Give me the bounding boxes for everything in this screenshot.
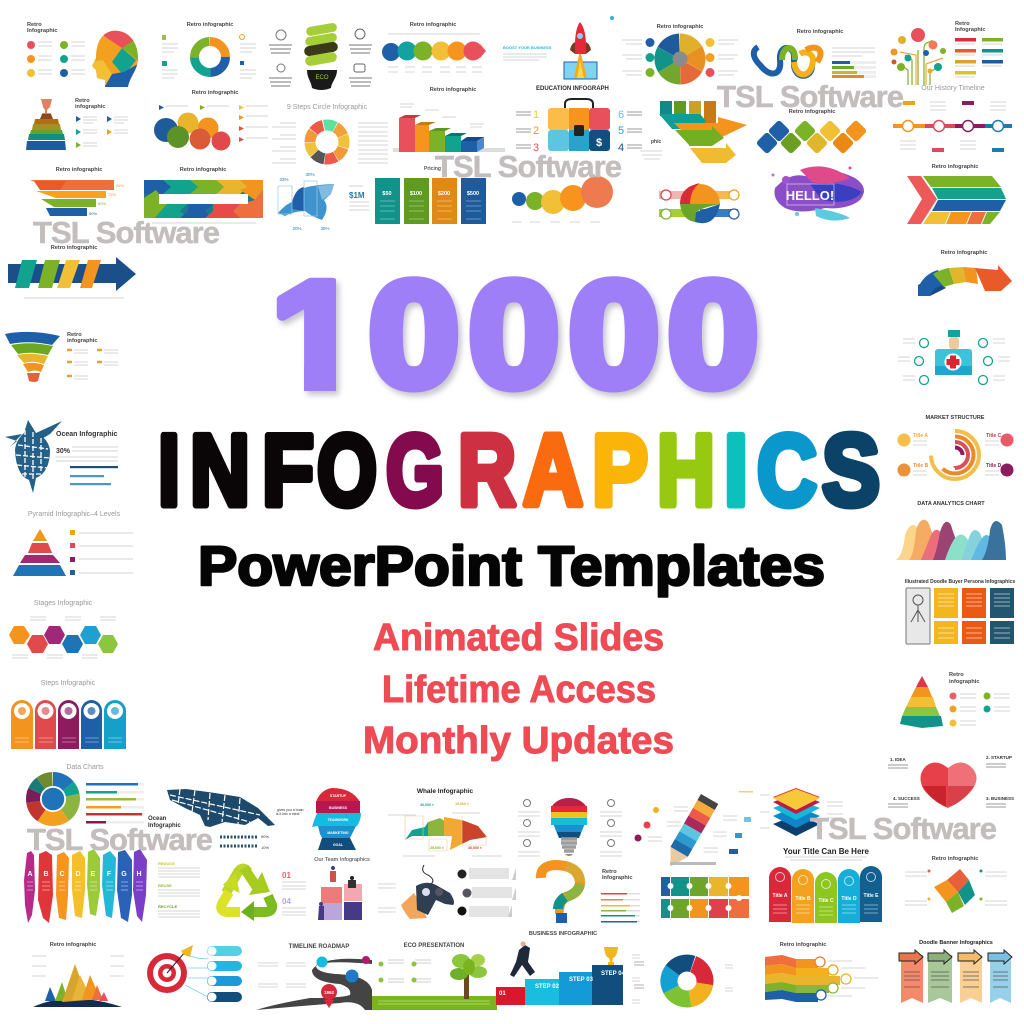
thumbnail: whale infographic: 25,000 × — [430, 846, 444, 850]
thumbnail: business steps: STEP 04 — [601, 971, 626, 977]
thumbnail: title cards: Title B — [795, 896, 811, 902]
thumbnail: percentage funnel: 75% — [108, 192, 116, 197]
thumbnail: chevron frame — [144, 167, 263, 223]
thumbnail: data analytics hump chart — [896, 501, 1006, 560]
thumbnail: recycle arrows — [158, 861, 272, 921]
thumbnail: recycle arrows: REDUCE — [158, 861, 175, 866]
thumbnail: 3D pyramid — [900, 672, 1010, 728]
thumbnail: curved arrow — [918, 250, 1012, 296]
thumbnail: whale infographic — [388, 788, 502, 856]
thumbnail: puzzle heart: 2. STARTUP — [986, 755, 1012, 760]
thumbnail: hexagonal pie: Retro infographic — [657, 24, 703, 30]
thumbnail: recycle arrows: REUSE — [158, 883, 172, 888]
thumbnail: history timeline: Our History Timeline — [921, 85, 985, 92]
thumbnail: big chevron: Retro infographic — [932, 164, 978, 170]
thumbnail: education briefcase: 5 — [618, 125, 624, 137]
thumbnail: whale infographic: 30,000 × — [420, 803, 434, 807]
thumbnail: watercolor brush strokes: G — [121, 871, 127, 878]
heading: INFOGRAPHICS: S — [822, 415, 880, 527]
thumbnail: watercolor brush strokes — [24, 849, 147, 923]
heading: INFOGRAPHICS: F — [262, 415, 314, 527]
thumbnail: six chain circles — [382, 22, 486, 72]
thumbnail: stages hexagons — [9, 600, 118, 658]
thumbnail: whale infographic: 15,000 × — [455, 802, 469, 806]
heading: INFOGRAPHICS: I — [158, 415, 180, 527]
watermark: TSL Software top right: TSL Software — [717, 79, 904, 114]
thumbnail: title cards: Title D — [841, 896, 857, 902]
heading: INFOGRAPHICS: N — [190, 415, 250, 527]
thumbnail: layered head — [312, 788, 361, 850]
thumbnail: percentage funnel: 60% — [98, 201, 106, 206]
thumbnail: mountains — [32, 942, 124, 1007]
thumbnail: puzzle head: Retro — [27, 22, 42, 28]
thumbnail: ocean whale tiles: Infographic — [148, 823, 181, 829]
thumbnail: spiral funnel: Retro — [67, 332, 82, 338]
thumbnail: puzzle cross: Retro infographic — [932, 856, 978, 862]
thumbnail: education briefcase: 6 — [618, 109, 624, 121]
watermark: TSL Software bottom right: TSL Software — [810, 811, 997, 846]
thumbnail: eco presentation: ECO PRESENTATION — [404, 943, 464, 949]
thumbnail: pricing table — [375, 166, 486, 224]
thumbnail: rocket: BOOST YOUR BUSINESS — [503, 45, 552, 50]
thumbnail: turtle chart: 33% — [279, 177, 289, 182]
thumbnail: layered head: TEAMWORK — [328, 818, 349, 822]
thumbnail: idea tree with bars: Infographic — [955, 27, 985, 33]
thumbnail: education briefcase: EDUCATION INFOGRAPH — [536, 86, 609, 92]
thumbnail: big chevron — [907, 164, 1006, 224]
heading: INFOGRAPHICS: C — [757, 415, 817, 527]
thumbnail: folded ribbon with circles: Retro infographic — [780, 942, 826, 948]
thumbnail: 3D bar chart — [393, 87, 505, 152]
heading: INFOGRAPHICS: G — [386, 415, 444, 527]
thumbnail: stepped pyramid with trophy — [26, 98, 128, 150]
thumbnail: puzzle heart: 1. IDEA — [890, 757, 907, 762]
thumbnail: long arrow — [8, 245, 136, 298]
thumbnail: idea tree with bars: Retro — [955, 21, 970, 27]
thumbnail: watercolor brush strokes: A — [27, 871, 33, 878]
thumbnail: history timeline — [893, 85, 1012, 152]
thumbnail: ocean whale tiles: 90% — [261, 834, 269, 839]
thumbnail: puzzle heart: 4. SUCCESS — [893, 796, 920, 801]
thumbnail: rocket — [503, 16, 614, 79]
thumbnail: layered bulb — [518, 798, 622, 856]
thumbnail: ocean turtle — [5, 420, 118, 493]
thumbnail: six chain circles: Retro infographic — [410, 22, 456, 28]
thumbnail: puzzle head — [27, 22, 140, 88]
thumbnail: question mark: Infographic — [602, 875, 632, 881]
thumbnail: eco bulb — [269, 22, 372, 90]
thumbnail: watercolor brush strokes: F — [107, 871, 112, 878]
thumbnail: four level pyramid — [13, 511, 133, 576]
thumbnail: timeline roadmap — [256, 944, 372, 1010]
thumbnail: spiral funnel: infographic — [67, 338, 97, 344]
feature line: Monthly Updates: Monthly Updates — [363, 720, 674, 762]
thumbnail: hello splash: HELLO! — [786, 188, 834, 203]
thumbnail: puzzle head: Infographic — [27, 28, 57, 34]
thumbnail: ocean turtle: Ocean Infographic — [56, 431, 118, 438]
thumbnail: watercolor brush strokes: C — [59, 871, 65, 878]
thumbnail: nine steps circle — [272, 104, 388, 163]
heading: INFOGRAPHICS: I — [724, 415, 748, 527]
thumbnail: rounded diamonds: Retro infographic — [789, 109, 835, 115]
thumbnail: layered head: STARTUP — [330, 794, 347, 798]
thumbnail: whale infographic: 30,000 × — [468, 846, 482, 850]
thumbnail: circular arrows ring — [162, 22, 256, 78]
thumbnail: eco bulb: ECO — [315, 75, 329, 81]
thumbnail: turtle chart: 35% — [320, 226, 330, 231]
thumbnail: puzzle heart — [888, 755, 1014, 808]
thumbnail: watercolor brush strokes: H — [136, 871, 142, 878]
thumbnail: percentage funnel: Retro infographic — [56, 167, 102, 173]
thumbnail: ocean whale tiles: 10% — [261, 845, 269, 850]
thumbnail: business steps: STEP 02 — [535, 984, 560, 990]
heading: 10000 — [276, 276, 763, 400]
thumbnail: turtle chart — [278, 172, 369, 231]
thumbnail: growing circles — [512, 176, 613, 222]
thumbnail: turtle chart: 20% — [292, 226, 302, 231]
thumbnail: steps cards: Steps Infographic — [41, 680, 96, 687]
thumbnail: education briefcase: 3 — [533, 142, 539, 154]
thumbnail: percentage funnel: 85% — [116, 183, 124, 188]
heading: 10000: 0 — [368, 250, 460, 418]
thumbnail: four level pyramid: Pyramid Infographic–4 Levels — [28, 511, 121, 518]
thumbnail: stepped pyramid with trophy: infographic — [75, 104, 105, 110]
heading: INFOGRAPHICS: O — [317, 415, 377, 527]
thumbnail: mountains: Retro infographic — [50, 942, 96, 948]
thumbnail: percentage funnel — [30, 167, 124, 216]
thumbnail: whale infographic: Whale Infographic — [417, 788, 474, 795]
thumbnail: market structure radial chart — [898, 415, 1014, 479]
thumbnail: buyer persona: Illustrated Doodle Buyer Persona Infographics — [905, 579, 1015, 585]
thumbnail: 3D sphere — [659, 183, 739, 223]
thumbnail: title cards: Your Title Can Be Here — [783, 847, 870, 856]
thumbnail: ocean whale tiles: gives you a brain, — [277, 808, 304, 812]
thumbnail: market structure radial chart: Title C — [986, 433, 1002, 439]
heading: INFOGRAPHICS: R — [458, 415, 516, 527]
thumbnail: medical kit — [898, 330, 1010, 384]
thumbnail: market structure radial chart: Title A — [913, 433, 928, 439]
thumbnail: 3D pyramid: Retro — [949, 672, 964, 678]
thumbnail: gears: Retro infographic — [192, 90, 238, 96]
thumbnail: puzzle heart: 3. BUSINESS — [986, 796, 1014, 801]
heading: PowerPoint Templates: PowerPoint Templates — [198, 534, 825, 597]
thumbnail: spiral funnel — [5, 332, 118, 382]
heading: INFOGRAPHICS: P — [592, 415, 648, 527]
thumbnail: bent arrows: phic — [651, 139, 661, 145]
thumbnail: puzzle cross — [905, 856, 1007, 913]
thumbnail: title cards: Title C — [818, 898, 834, 904]
thumbnail: education briefcase: 1 — [533, 109, 539, 121]
thumbnail: buyer persona — [905, 579, 1015, 644]
thumbnail: layered head: MARKETING — [327, 831, 349, 835]
thumbnail: pricing table: $50 — [382, 191, 392, 197]
thumbnail: striped pencil — [634, 794, 751, 872]
feature line: Animated Slides: Animated Slides — [373, 617, 664, 659]
thumbnail: business steps: BUSINESS INFOGRAPHIC — [529, 931, 597, 937]
thumbnail: education briefcase — [516, 86, 642, 154]
thumbnail: education briefcase: 4 — [618, 142, 624, 154]
heading: 10000: 1 — [271, 250, 363, 418]
thumbnail: watercolor brush strokes: B — [43, 871, 49, 878]
thumbnail: snake path: Retro infographic — [797, 29, 843, 35]
watermark: TSL Software top centre: TSL Software — [435, 149, 622, 184]
thumbnail: turtle chart: $1M — [349, 191, 365, 200]
thumbnail: title cards: Title E — [864, 893, 879, 899]
thumbnail: pricing table: $500 — [467, 191, 479, 197]
thumbnail: team puzzle: Our Team Infographics — [314, 857, 370, 863]
thumbnail: watercolor brush strokes: E — [91, 871, 96, 878]
thumbnail: pricing table: $100 — [410, 191, 422, 197]
thumbnail: doodle banners — [899, 940, 1012, 1003]
thumbnail: market structure radial chart: Title D — [986, 463, 1002, 469]
thumbnail: steps cards — [11, 680, 126, 749]
thumbnail: pricing table: $200 — [438, 191, 450, 197]
heading: INFOGRAPHICS: H — [657, 415, 715, 527]
heading: INFOGRAPHICS — [158, 415, 880, 527]
thumbnail: education briefcase: 2 — [533, 125, 539, 137]
thumbnail: layered head: GOAL — [333, 843, 344, 847]
thumbnail: bent arrows — [640, 101, 747, 163]
thumbnail: hexagonal pie — [622, 24, 738, 77]
thumbnail: long arrow: Retro infographic — [51, 245, 97, 251]
thumbnail: 3D bar chart: Retro infographic — [430, 87, 476, 93]
thumbnail: shutter circle — [634, 958, 710, 1004]
heading: 10000: 0 — [668, 250, 758, 418]
thumbnail: stepped pyramid with trophy: Retro — [75, 98, 90, 104]
thumbnail: business steps — [496, 931, 733, 1005]
thumbnail: business steps: STEP 03 — [569, 977, 594, 983]
thumbnail: business steps: 01 — [499, 991, 506, 997]
watermark: TSL Software bottom left: TSL Software — [27, 822, 213, 857]
thumbnail: snake path — [754, 29, 876, 78]
thumbnail: ocean whale tiles: Ocean — [148, 816, 167, 822]
thumbnail: recycle arrows: RECYCLE — [158, 904, 177, 909]
thumbnail: ocean turtle: 30% — [56, 448, 71, 455]
thumbnail: layer stack — [739, 788, 843, 836]
heading: INFOGRAPHICS: A — [523, 415, 583, 527]
thumbnail: data charts donut and bars: Data Charts — [66, 764, 104, 771]
thumbnail: gears — [154, 90, 268, 150]
thumbnail: team puzzle — [282, 857, 396, 920]
thumbnail: target — [147, 945, 242, 1002]
thumbnail: nine steps circle: 9 Steps Circle Infographic — [287, 104, 368, 111]
thumbnail: rounded diamonds — [756, 109, 867, 154]
watermark: TSL Software left: TSL Software — [33, 215, 220, 250]
thumbnail: layered head: BUSINESS — [329, 806, 348, 810]
thumbnail: eco presentation — [372, 943, 497, 1010]
thumbnail: data charts donut and bars — [33, 764, 144, 824]
thumbnail: percentage funnel: 50% — [89, 211, 97, 216]
thumbnail: pricing table: Pricing — [424, 166, 441, 172]
thumbnail: doodle banners: Doodle Banner Infographics — [919, 940, 993, 946]
thumbnail: team puzzle: 01 — [282, 871, 291, 880]
thumbnail: market structure radial chart: Title B — [913, 463, 929, 469]
thumbnail: timeline roadmap: 1992 — [324, 990, 335, 995]
feature line: Lifetime Access: Lifetime Access — [382, 669, 656, 711]
thumbnail: data analytics hump chart: DATA ANALYTICS CHART — [917, 501, 985, 507]
thumbnail: watercolor brush strokes: D — [75, 871, 81, 878]
thumbnail: market structure radial chart: MARKET STRUCTURE — [926, 415, 985, 421]
thumbnail: hello splash — [772, 166, 864, 221]
heading: 10000: 0 — [468, 250, 560, 418]
thumbnail: ocean whale tiles — [148, 789, 304, 850]
thumbnail: stages hexagons: Stages Infographic — [34, 600, 93, 607]
thumbnail: idea tree with bars — [890, 21, 1003, 85]
thumbnail: turtle chart: 30% — [305, 172, 315, 177]
thumbnail: title cards: Title A — [772, 893, 788, 899]
heading: 10000: 0 — [568, 250, 660, 418]
thumbnail: question mark — [541, 865, 640, 923]
thumbnail: chevron frame: Retro infographic — [180, 167, 226, 173]
thumbnail: ocean whale tiles: is it into a mind." — [276, 812, 302, 816]
thumbnail: game controller in hand — [401, 865, 516, 919]
thumbnail: circular arrows ring: Retro infographic — [187, 22, 233, 28]
thumbnail: education briefcase: $ — [596, 137, 602, 149]
thumbnail: curved arrow: Retro infographic — [941, 250, 987, 256]
thumbnail: team puzzle: 04 — [282, 897, 291, 906]
thumbnail: title cards — [769, 847, 882, 923]
thumbnail: timeline roadmap: TIMELINE ROADMAP — [289, 944, 349, 950]
thumbnail: 3D pyramid: infographic — [949, 679, 979, 685]
thumbnail: question mark: Retro — [602, 869, 617, 875]
thumbnail: folded ribbon with circles — [765, 942, 878, 1002]
thumbnail: jigsaw strip — [661, 877, 749, 918]
